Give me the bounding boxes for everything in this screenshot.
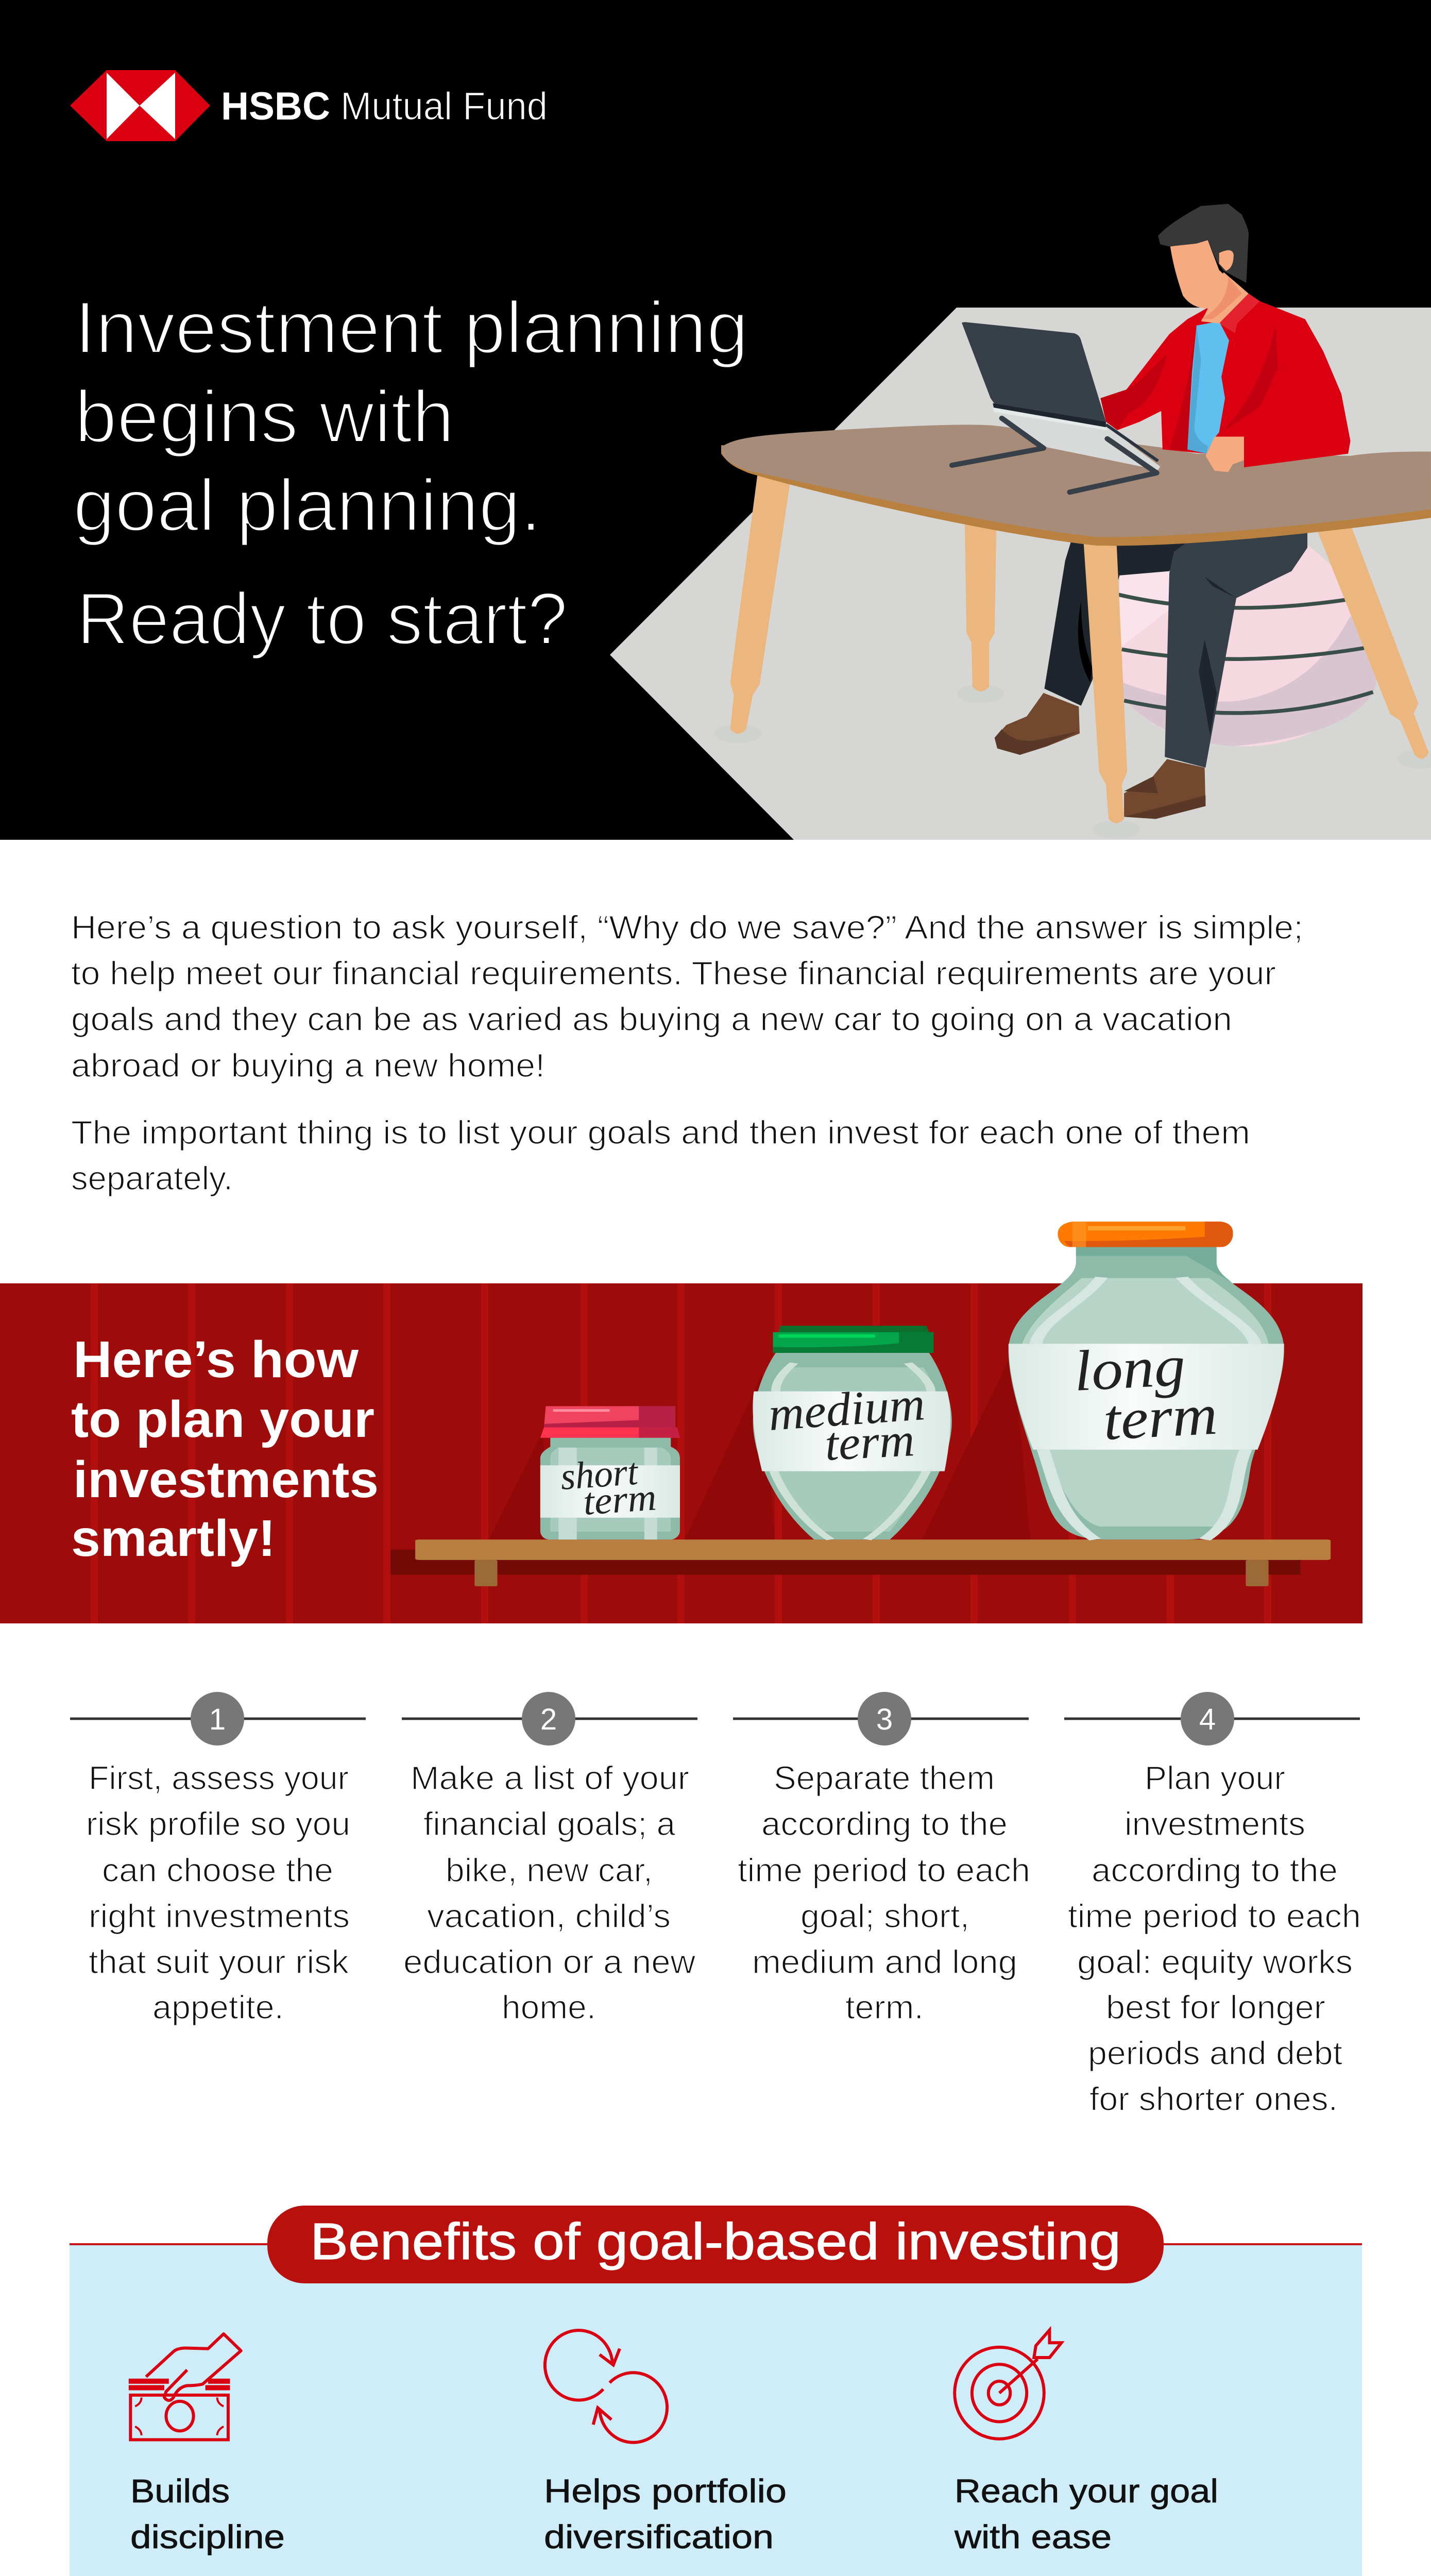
step 1: risk profile so you (86, 1805, 350, 1842)
handwritten jar labels: short (559, 1451, 640, 1498)
step 3: according to the (761, 1805, 1008, 1842)
intro paragraph: to help meet our financial requirements. These financial requirements are your (71, 955, 1276, 992)
panel heading: to plan your (71, 1391, 374, 1448)
step 3 (733, 1692, 1030, 2026)
illustration: man working on laptop at desk (715, 204, 1431, 839)
jar: medium term (753, 1326, 952, 1539)
panel heading: smartly! (71, 1510, 276, 1567)
benefit: helps portfolio diversification: Helps portfolio (544, 2472, 787, 2510)
step 2: bike, new car, (446, 1852, 653, 1889)
icon: target with arrow (955, 2330, 1061, 2439)
step 1: 1 (209, 1703, 226, 1736)
benefit: builds discipline: Builds (130, 2472, 230, 2510)
shelf with jars (390, 1222, 1331, 1586)
hero title (73, 287, 748, 660)
handwritten jar labels: term (582, 1476, 658, 1523)
step 1 (70, 1692, 366, 2026)
step 1: that suit your risk (89, 1943, 349, 1980)
step 2: home. (502, 1989, 596, 2026)
handwritten jar labels: long (1072, 1334, 1187, 1403)
panel: how to plan your investments (0, 1222, 1362, 1623)
icon: cycling arrows (545, 2330, 667, 2443)
step 2 (402, 1692, 697, 2026)
hero title: Investment planning (75, 287, 748, 369)
logo: HSBC Mutual Fund: HSBC (221, 84, 330, 128)
icon: hand depositing money (129, 2334, 241, 2440)
benefit: reach your goal with ease: with ease (954, 2518, 1112, 2555)
step 4: best for longer (1106, 1989, 1325, 2026)
step 3: 3 (876, 1703, 893, 1736)
panel heading: investments (73, 1451, 379, 1509)
man torso and head (1100, 204, 1351, 472)
step 3: Separate them (774, 1759, 995, 1797)
benefits heading pill: Benefits of goal-based investing (310, 2213, 1121, 2270)
logo: HSBC Mutual Fund: Mutual Fund (340, 84, 548, 128)
handwritten jar labels: term (1102, 1383, 1219, 1452)
step 2: education or a new (403, 1943, 696, 1980)
benefit: helps portfolio diversification: diversification (544, 2518, 774, 2555)
benefit: builds discipline (129, 2472, 498, 2576)
step 1: First, assess your (89, 1759, 349, 1797)
benefit: reach your goal with ease (953, 2472, 1314, 2576)
benefit: builds discipline: discipline (130, 2518, 285, 2555)
steps (70, 1692, 1361, 2117)
laptop (952, 322, 1160, 492)
step 2: financial goals; a (423, 1805, 675, 1842)
hero title: goal planning. (73, 465, 541, 547)
step 1: can choose the (102, 1852, 333, 1889)
step 3: time period to each (738, 1852, 1030, 1889)
handwritten jar labels: term (824, 1413, 916, 1470)
jar: short term (540, 1406, 680, 1539)
intro paragraph (71, 909, 1303, 1197)
handwritten jar labels (559, 1334, 1219, 1523)
step 3: term. (845, 1989, 924, 2026)
step 1: right investments (89, 1897, 350, 1935)
step 3: goal; short, (800, 1897, 969, 1935)
hero panel (0, 0, 1431, 840)
benefit: helps portfolio diversification (544, 2472, 902, 2576)
step 4: periods and debt (1088, 2035, 1342, 2072)
step 4 (1064, 1692, 1361, 2117)
step 4: time period to each (1068, 1897, 1361, 1935)
hero title: Ready to start? (77, 578, 568, 660)
handwritten jar labels: medium (766, 1377, 927, 1440)
step 4: investments (1125, 1805, 1305, 1842)
panel: benefits of goal-based investing (49, 2206, 1382, 2576)
hero title: begins with (75, 376, 454, 458)
step 4: Plan your (1145, 1759, 1285, 1797)
benefit: reach your goal with ease: Reach your goal (955, 2472, 1218, 2510)
step 3: medium and long (752, 1943, 1017, 1980)
step 2: 2 (540, 1703, 557, 1736)
step 4: 4 (1199, 1703, 1216, 1736)
intro paragraph: separately. (71, 1160, 233, 1197)
step 4: according to the (1092, 1852, 1338, 1889)
panel heading: Here’s how (73, 1331, 359, 1388)
step 2: Make a list of your (411, 1759, 689, 1797)
step 4: goal: equity works (1077, 1943, 1353, 1980)
jar: long term (1009, 1222, 1284, 1539)
benefits heading pill (267, 2206, 1164, 2283)
intro paragraph: Here’s a question to ask yourself, “Why do we save?” And the answer is simple; (71, 909, 1303, 946)
logo: HSBC Mutual Fund (70, 70, 548, 141)
intro paragraph: goals and they can be as varied as buying a new car to going on a vacation (71, 1001, 1232, 1038)
step 2: vacation, child’s (427, 1897, 671, 1935)
step 4: for shorter ones. (1089, 2080, 1338, 2117)
step 1: appetite. (152, 1989, 284, 2026)
panel heading (71, 1331, 379, 1567)
intro paragraph: abroad or buying a new home! (71, 1047, 545, 1084)
intro paragraph: The important thing is to list your goals and then invest for each one of them (71, 1114, 1250, 1151)
